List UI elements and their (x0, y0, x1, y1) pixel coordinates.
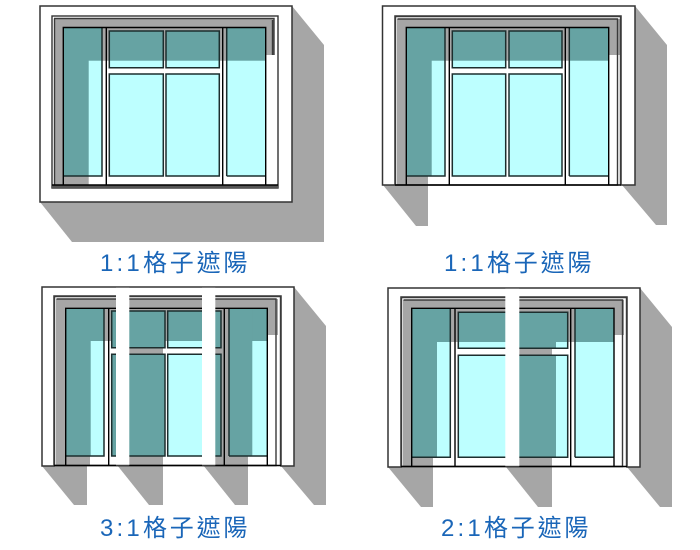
panel: 2:1 lattice shading (388, 288, 672, 507)
panel: 1:1 lattice shading, full wall (40, 6, 324, 242)
window frame lines (54, 308, 281, 466)
label: top left: 1:1格子遮陽 (100, 250, 250, 277)
panel: 1:1 lattice shading, side fins (382, 6, 667, 226)
outer wall with fins (42, 287, 294, 466)
window glass and shadow (66, 309, 267, 457)
outer wall with fins (388, 288, 640, 467)
label: top right: 1:1格子遮陽 (444, 250, 594, 277)
vertical fin 2 (202, 288, 215, 465)
window recess (395, 16, 621, 185)
window glass and shadow (405, 305, 620, 460)
window opening (52, 16, 278, 188)
panel: 3:1 lattice shading (42, 287, 326, 505)
label: bottom right: 2:1格子遮陽 (441, 515, 591, 542)
window glass and shadow (407, 28, 608, 177)
window frame lines (395, 28, 621, 185)
vertical fin (505, 289, 519, 466)
outer wall with side fins (382, 6, 635, 185)
window recess (54, 296, 281, 466)
cast shadows of side walls (383, 6, 667, 226)
outer wall frame (40, 6, 292, 202)
cast shadows of fins (42, 287, 326, 505)
cast shadow on wall (40, 6, 324, 242)
window recess (401, 298, 627, 467)
window glass and shadow (60, 25, 270, 180)
cast shadows of fins (388, 288, 672, 507)
window frame lines (52, 28, 278, 185)
label: bottom left: 3:1格子遮陽 (100, 515, 250, 542)
vertical fin 1 (116, 288, 129, 465)
window frame lines (401, 308, 627, 466)
